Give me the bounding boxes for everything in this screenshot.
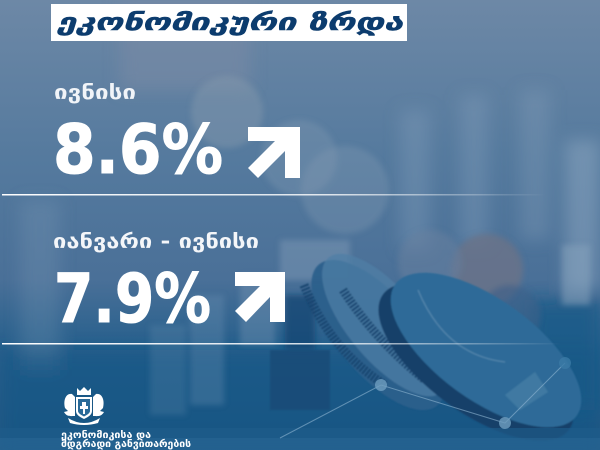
- logo: coat of arms: [64, 387, 104, 425]
- coin stack: [270, 234, 600, 450]
- title banner: [51, 4, 407, 41]
- value: January-June growth: 7.9%: [54, 260, 211, 339]
- ministry name: ეკონომიკისა და: [61, 430, 151, 441]
- divider lines: [2, 194, 562, 344]
- title banner: ეკონომიკური ზრდა: [56, 10, 403, 36]
- icon: up arrow 1: [248, 127, 300, 178]
- label: June: ივნისი: [54, 80, 136, 104]
- icon: up arrow 2: [235, 272, 285, 322]
- label: January-June: იანვარი - ივნისი: [53, 229, 259, 253]
- ministry name: [61, 430, 191, 450]
- network line graphic: [280, 357, 571, 438]
- value: June growth: 8.6%: [53, 111, 223, 190]
- ministry name: მდგრადი განვითარების: [61, 439, 191, 450]
